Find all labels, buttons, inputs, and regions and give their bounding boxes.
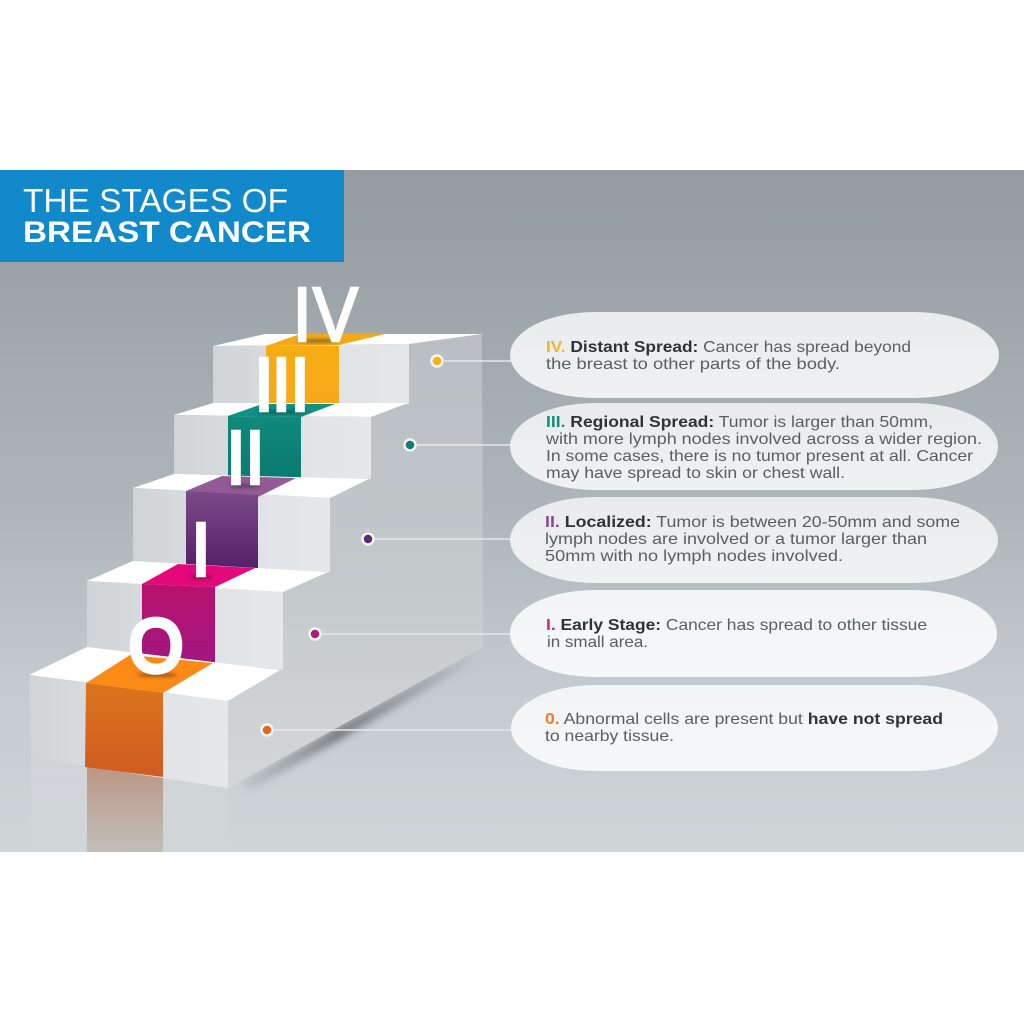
card: stage IV [510,312,999,398]
card: stage 0: to nearby tissue. [545,728,674,745]
connector IV [432,356,512,366]
card: stage 0 [511,685,998,771]
numeral shadows [137,339,340,677]
staircase side wall [228,334,483,788]
connector II [362,534,512,544]
card: stage III [510,403,998,490]
title banner: BREAST CANCER [23,216,311,249]
staircase [29,334,483,790]
step 0 [29,647,280,788]
card: stage III: In some cases, there is no tumor present at all. Cancer [546,448,974,465]
numeral 0: O [129,604,183,688]
card: stage IV: IV. Distant Spread: Cancer has spread beyond [546,339,911,356]
title banner: THE STAGES OF [23,182,288,219]
step II [133,474,369,572]
step I [87,561,328,670]
numeral I: I [190,507,212,593]
card: stage III: III. Regional Spread: Tumor is larger than 50mm, [546,414,933,431]
card: stage II: II. Localized: Tumor is between 20-50mm and some [545,514,960,531]
step IV [213,334,482,404]
card: stage III: may have spread to skin or chest wall. [546,465,845,482]
step III [174,403,408,479]
card: stage IV: the breast to other parts of the body. [546,356,840,373]
connector 0 [262,724,512,736]
card: stage I: I. Early Stage: Cancer has spread to other tissue [546,617,927,634]
connector III [404,440,512,450]
card: stage II [510,497,998,583]
card: stage 0: 0. Abnormal cells are present but have not spread [545,711,943,728]
numeral IV: IV [293,272,359,358]
floor reflection of staircase [31,758,228,852]
background panel [0,170,1024,852]
staircase cast shadow [240,652,472,790]
card: stage I [510,590,997,677]
card: stage III: with more lymph nodes involved across a wider region. [545,431,982,448]
title banner [0,170,344,262]
numeral II: II [225,415,266,501]
card: stage II: lymph nodes are involved or a tumor larger than [545,531,927,548]
numeral III: III [253,342,311,428]
card: stage I: in small area. [547,634,648,651]
connector I [310,628,512,640]
card: stage II: 50mm with no lymph nodes involved. [545,548,843,565]
